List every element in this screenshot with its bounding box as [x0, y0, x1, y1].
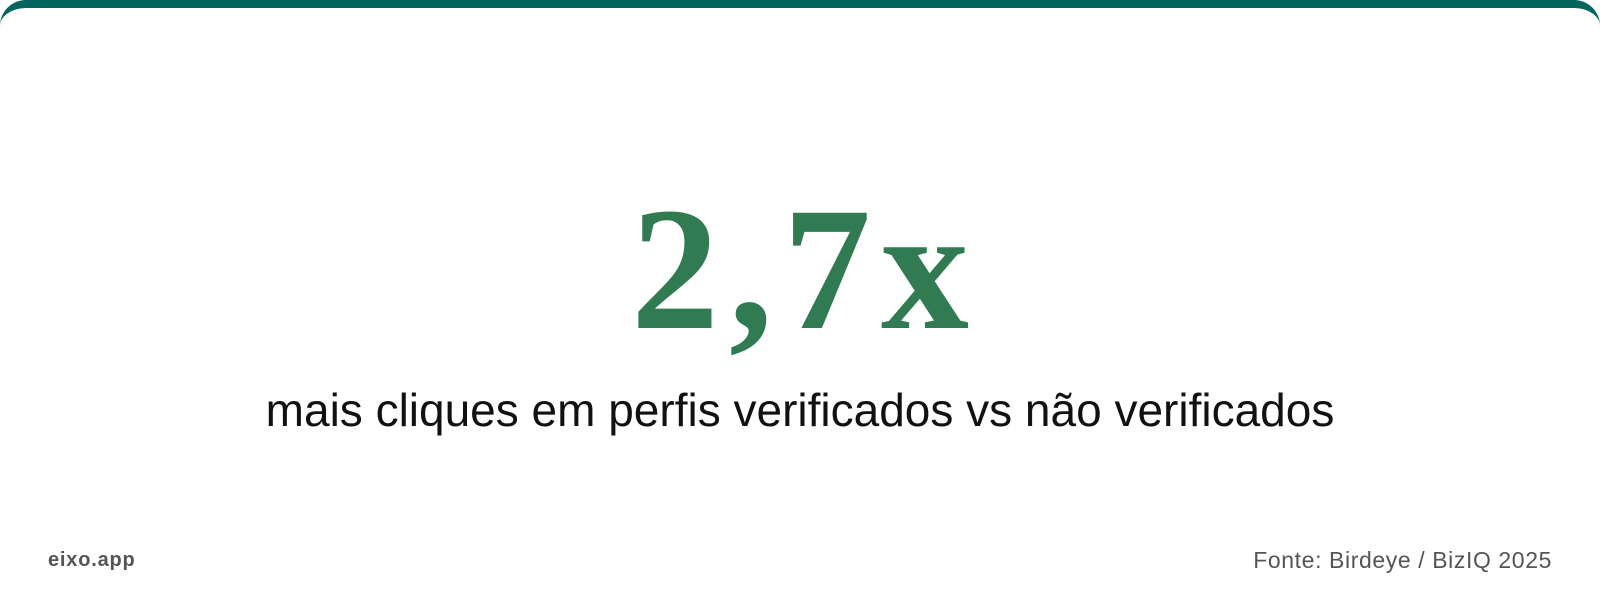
brand footer: eixo.app	[48, 549, 136, 571]
subtitle: mais cliques em perfis verificados vs não verificados	[266, 384, 1334, 436]
big number: 2,7x	[631, 172, 979, 367]
source footer: Fonte: Birdeye / BizIQ 2025	[1253, 547, 1552, 573]
